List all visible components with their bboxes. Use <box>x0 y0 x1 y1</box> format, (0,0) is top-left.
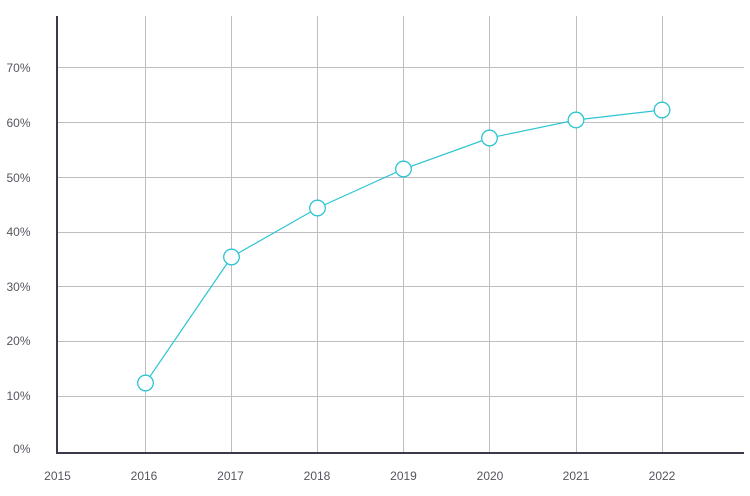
y axis labels: 0% <box>13 442 31 456</box>
x axis labels: 2017 <box>217 469 244 483</box>
y axis labels: 70% <box>6 61 31 75</box>
y axis labels: 30% <box>6 280 31 294</box>
y axis labels <box>6 61 31 456</box>
x axis <box>56 452 744 454</box>
y axis <box>56 16 58 454</box>
y axis labels: 60% <box>6 116 31 130</box>
y axis labels: 50% <box>6 171 31 185</box>
x axis labels: 2021 <box>563 469 590 483</box>
x axis labels <box>44 469 676 483</box>
y axis labels: 20% <box>6 334 31 348</box>
x axis labels: 2016 <box>131 469 158 483</box>
x axis labels: 2022 <box>649 469 676 483</box>
x axis labels: 2019 <box>390 469 417 483</box>
data line <box>146 110 662 383</box>
x axis labels: 2020 <box>477 469 504 483</box>
y axis labels: 10% <box>6 389 31 403</box>
y axis labels: 40% <box>6 225 31 239</box>
data points <box>138 102 670 391</box>
x axis labels: 2018 <box>304 469 331 483</box>
x axis labels: 2015 <box>44 469 71 483</box>
